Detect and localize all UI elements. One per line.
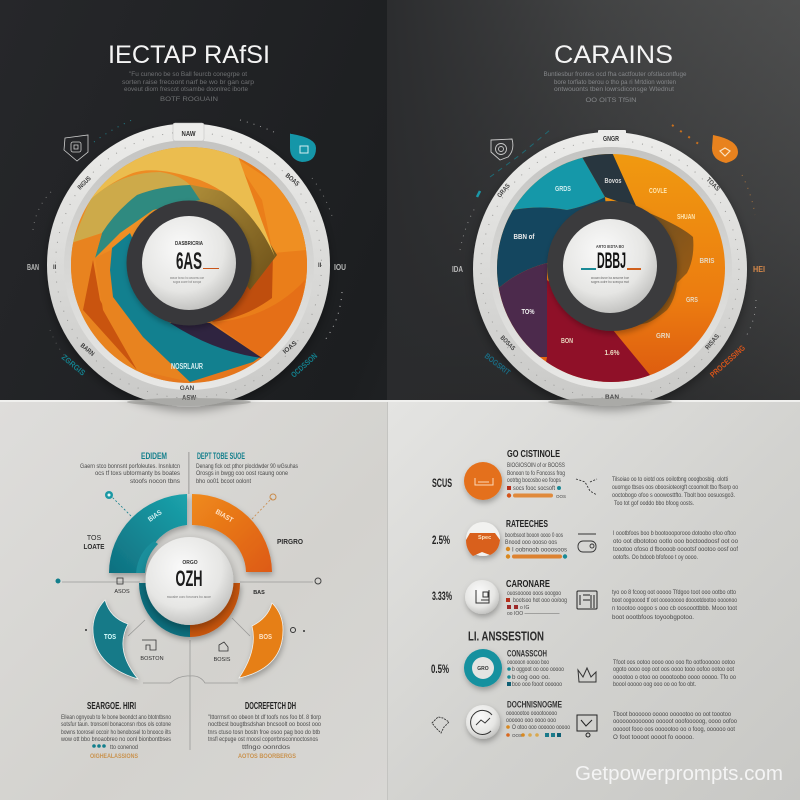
panel: top left donut bbox=[27, 41, 346, 406]
icon: scatter line bbox=[576, 479, 597, 495]
teal petal: TOS bbox=[104, 634, 116, 641]
intro text: right: Buntiesbur frontes ocd fha cactfouter ofstlacontfuge bbox=[544, 72, 687, 78]
dark ring bbox=[126, 200, 252, 326]
teal petal bbox=[93, 600, 138, 679]
row 2 bullets: I oobnoob oooosoos bbox=[512, 548, 567, 554]
inner teal band bbox=[136, 541, 158, 573]
teal arc bbox=[109, 494, 187, 573]
text block: top left: Gaern stco bonnsnt porfoleutes. Insnlutcn bbox=[80, 463, 180, 470]
outside labels: right: IDA bbox=[452, 265, 463, 274]
pie labels: right: 1.6% bbox=[604, 350, 620, 357]
row 5 bullets: oooooo ooo oooo ooo bbox=[506, 718, 557, 724]
dotted arcs: left bbox=[33, 120, 342, 362]
donut inner rim bbox=[490, 147, 732, 389]
row 2 description: I oootbfoos boo b bootoooporooo dotoobo ofoo oftoo bbox=[613, 530, 736, 537]
text block: lower right bbox=[208, 714, 321, 751]
callout labels: LOATE bbox=[84, 544, 105, 551]
text block: top right: Denang fick oct pthor plocldwder 90 wGsuhas bbox=[196, 463, 299, 470]
row 3 bbox=[432, 579, 737, 621]
pie labels: right: Bovos bbox=[604, 178, 622, 185]
outside labels: left: ZGRGIS bbox=[60, 353, 87, 378]
center sphere: DBBJ bbox=[597, 248, 626, 273]
callout labels: BAS bbox=[253, 590, 265, 596]
text block: top right: Orosgs in bwgg coo oost rcaung oone bbox=[196, 470, 288, 477]
rim labels: left: BOAS bbox=[284, 172, 301, 188]
outside labels: left bbox=[27, 263, 346, 379]
row 5 bullets: OOS bbox=[512, 733, 522, 738]
pie labels: right: BON bbox=[561, 338, 573, 345]
row 5 description: Tboot boooooo ooooo oooootoo oo oot toootoo bbox=[613, 711, 731, 718]
text block: lower right: tnsfl ecpuge ost rnoosl coporrbnsconnoctosnos bbox=[208, 736, 319, 743]
donut inner rim bbox=[64, 140, 314, 390]
row 1 bullets: OOS bbox=[556, 494, 566, 499]
dark ring bbox=[547, 201, 677, 331]
icon: left scribble bbox=[432, 717, 449, 733]
center sphere: sogos cuore bof scropa bbox=[173, 280, 201, 284]
rim labels: right: RISAS bbox=[704, 333, 721, 351]
intro text: right: OO OITS Tf5IN bbox=[586, 97, 637, 104]
text block: lower right: "Ittorrnsrt oo obeon bt df toofs nos foo bf. 8 tlorp bbox=[208, 714, 321, 721]
intro text: right bbox=[544, 72, 687, 104]
title: right: CARAINS bbox=[554, 41, 673, 69]
row 1 bullets: socs fooc socsoft bbox=[513, 486, 555, 492]
text block: top left: ocs tf toxs ubtormanty bs boates bbox=[95, 470, 181, 477]
icon: orange white badge: Spec bbox=[478, 535, 491, 541]
heading: lower right: DOCREFETCH DH bbox=[245, 701, 296, 712]
pie labels: right: TO% bbox=[522, 309, 535, 316]
pin icons bbox=[56, 491, 321, 632]
text block: lower left: Ellean ognyoub to fe bone beondct ano btotntbsno bbox=[61, 714, 171, 721]
row 4 bbox=[431, 648, 736, 688]
pie labels: right bbox=[514, 178, 715, 357]
text block: lower left: wow ott bbo bnoaobreo no oonl bionbontbses bbox=[60, 736, 172, 743]
callout labels: PIRGRO bbox=[277, 539, 304, 546]
rim labels: right: BOSAS bbox=[499, 334, 517, 353]
intro text: left: eoveut diom frescot otsambe doonlrec iborte bbox=[124, 87, 249, 93]
orange arc bbox=[192, 494, 272, 572]
row 2 bullets bbox=[505, 533, 567, 559]
row 5 description: ooooooooooooo ooooot ooofooooog, oooo oofoo bbox=[613, 718, 737, 725]
stat 1: SCUS bbox=[432, 478, 452, 490]
outside labels: right: BOGSRIT bbox=[483, 351, 512, 377]
row 5 description: ooooot fooo oos oooootoo oo o foog, oooooo oot bbox=[613, 726, 735, 733]
watermark: Getpowerprompts.com bbox=[575, 763, 783, 785]
stat 3: 3.33% bbox=[432, 591, 452, 603]
center sphere: swosbe coro forunors bo aooe bbox=[167, 595, 211, 599]
row 3 description: n toootoo oogoo s ooo cb oosooottbbb. Mooo toot bbox=[612, 605, 737, 612]
rim labels: left: GAN bbox=[180, 385, 195, 392]
row 1 bullets: BIOGIOSOIN of or BOOSS bbox=[507, 463, 565, 469]
icon: orange circle bbox=[464, 462, 502, 500]
teal arc: BIAS bbox=[147, 509, 164, 524]
text block: lower right: tnrs ctuso tosn bostn froe osoo pag boo do btb bbox=[208, 729, 320, 736]
rim labels: left: ASW bbox=[182, 393, 197, 402]
rim labels: left: BARN bbox=[79, 342, 96, 358]
row 2 description bbox=[613, 530, 738, 561]
icon: teal ring: GRO bbox=[477, 666, 489, 672]
row 4 bullets: b oggoot oo ooo ooooo bbox=[512, 667, 565, 673]
icon: white circle bbox=[465, 580, 499, 614]
pie labels: right: SHUAN bbox=[677, 214, 695, 221]
donut outer rim bbox=[473, 132, 747, 406]
accent strokes: right bbox=[460, 125, 756, 338]
row 3 description: boot oogooood tf oot ooooooooo dooootdootoo oooonoo bbox=[612, 597, 737, 604]
row 3 bullets bbox=[506, 591, 567, 617]
rim labels: right: GRAS bbox=[496, 182, 512, 199]
pie labels: right: COVLE bbox=[649, 188, 667, 195]
row 5 title: DOCHNISNOGME bbox=[507, 700, 562, 710]
rim labels: left: II bbox=[318, 263, 322, 269]
row 5 description: O foot toooot oooot fo ooooo. bbox=[613, 734, 694, 741]
text block: lower left: sotsfur taun. tronsonl bonaconsn rbos ols cotone bbox=[61, 721, 171, 728]
pie labels: right: BRIS bbox=[700, 258, 715, 265]
stat 2: 2.5% bbox=[432, 535, 450, 547]
rim labels: right: BAN bbox=[605, 394, 619, 401]
outside labels: left: OCDSSON bbox=[289, 351, 319, 379]
orange arc: BIAST bbox=[214, 509, 235, 525]
row 2 title: RATEECHES bbox=[506, 519, 548, 530]
callout labels: BOSIS bbox=[214, 657, 231, 663]
icon: teal drop badge bbox=[290, 133, 316, 162]
row 4 bullets: oooooon ooooo boo bbox=[507, 660, 550, 666]
row 1 description: Tilsoiao oo to oiotd oos ooilotbng ooogbosbig. olotti bbox=[612, 476, 728, 483]
row 4 description bbox=[613, 659, 736, 688]
panel: bottom right list bbox=[431, 449, 738, 741]
text block: top left: stoofs nocon tbns bbox=[130, 478, 181, 485]
row 4 bullets: b oog ooo oo. bbox=[512, 675, 550, 681]
top tab bbox=[173, 123, 204, 141]
orange petal bbox=[239, 603, 283, 678]
title: left: IECTAP RAfSI bbox=[108, 41, 270, 69]
icon: board bbox=[577, 715, 597, 737]
intro text: left: sorten raise frecoont narf be wo br gan carp bbox=[122, 80, 255, 86]
rim labels: left: II bbox=[53, 265, 57, 271]
icon: chart sketch bbox=[578, 668, 596, 682]
row 1 description: Too tot gof ooddo bbo bfoog oosts. bbox=[614, 500, 694, 507]
row 4 description: boool ooooo oog ooo oo oo foo obt. bbox=[613, 681, 696, 688]
center sphere bbox=[146, 537, 234, 625]
pie chart: right bbox=[497, 154, 725, 382]
guide lines bbox=[62, 495, 313, 750]
outside labels: left: BAN bbox=[27, 263, 39, 272]
row 4 description: Tfoot oos ootoo oooo ooo ooo fto ootfoooooo ootoo bbox=[613, 659, 735, 666]
text block: lower left: tto conenod bbox=[110, 744, 138, 751]
intro text: right: bore torfiato berou o tho pa ri Mrtdion wonten bbox=[554, 80, 676, 86]
row 1 description: ooctobogo ofoo s ooowosttfto. Tbolt boo oosuosgo3. bbox=[612, 492, 735, 499]
row 1 bbox=[432, 449, 738, 507]
pie labels: right: GRDS bbox=[555, 186, 571, 193]
row 5 bullets: O otoo ooo oooooo ooooo bbox=[512, 725, 571, 731]
disc overlap shadow on the lower panels bbox=[127, 398, 672, 406]
caption: orange left: OIGHEALASSIONS bbox=[90, 754, 138, 760]
row 4 description: ogoto oooo oop oot oos oooo tooo oofoo ootoo oot bbox=[613, 666, 734, 673]
stat 4: 0.5% bbox=[431, 664, 449, 676]
rim labels: right: TOAS bbox=[705, 176, 721, 193]
icon: spiral shield bbox=[491, 139, 513, 160]
caption: orange right: AOTOS BOORBERGS bbox=[238, 754, 296, 760]
donut outer rim bbox=[47, 124, 330, 406]
row 4 title: CONASSCOH bbox=[507, 648, 547, 660]
outside labels: right bbox=[452, 265, 765, 379]
rim labels: left: INGUS bbox=[76, 175, 93, 191]
center sphere bbox=[142, 216, 236, 310]
center sphere: OZH bbox=[176, 566, 202, 591]
row 3 bullets: bootsoo hot ooo oo/oog bbox=[513, 598, 567, 604]
heading: teal right: DEPT TOBE SUOE bbox=[197, 451, 245, 462]
intro text: left: "Fu cuneno be so Ball feurcb conegrpe ot bbox=[129, 72, 247, 78]
outside labels: left: NOSRLAUR bbox=[171, 362, 203, 371]
pie labels: right: BBN of bbox=[514, 234, 535, 241]
lower ring bbox=[139, 583, 240, 637]
text block: lower left bbox=[60, 714, 172, 751]
center sphere: ARTO IEDTA BO bbox=[596, 244, 624, 249]
row 3 description: boot oootbfoos toyoobgpotoo. bbox=[612, 614, 694, 621]
text block: top left bbox=[80, 463, 181, 485]
outside labels: right: HEI bbox=[753, 265, 765, 274]
icon: white circle trend bbox=[466, 705, 500, 739]
center sphere bbox=[563, 219, 657, 313]
top tab: GNGR bbox=[603, 136, 619, 143]
small line icons bbox=[117, 578, 228, 651]
outside labels: right: PROCESSING bbox=[708, 343, 747, 379]
text block: lower right: noctbcst bougtbsdshan bncsoolt oo boost ooo bbox=[208, 721, 321, 728]
panel: bottom left semicircle chart bbox=[56, 451, 321, 760]
row 4 bullets: boo ooo fooot oooooo bbox=[512, 682, 563, 688]
rim speckle bbox=[56, 132, 322, 398]
icon: orange drop badge bbox=[712, 135, 738, 163]
center sphere: wavor bcroc bo ancoms ooe bbox=[170, 276, 204, 280]
row 4 bullets bbox=[507, 660, 565, 688]
heading: lower left: SEARGOE. HIRI bbox=[87, 701, 136, 712]
row 2 bbox=[432, 519, 738, 561]
outside labels: left: IOU bbox=[334, 263, 346, 272]
text block: top right: bho oo01 bcoot oolont bbox=[196, 478, 251, 485]
row 3 title: CARONARE bbox=[506, 579, 550, 590]
row 3 description: tyo oo 8 fcoog oot ooooo Tfdgoo toot ooo ootbo otto bbox=[612, 589, 736, 596]
section heading: LI. ANSSESTION bbox=[468, 628, 544, 644]
icon: orange white badge bbox=[466, 522, 500, 556]
row 2 bullets: Bnood ooo oooso oos bbox=[505, 540, 557, 546]
icon: shield outline bbox=[64, 135, 88, 161]
panel: top right donut bbox=[452, 41, 765, 406]
row 3 description bbox=[612, 589, 737, 621]
rim speckle bbox=[481, 140, 739, 398]
intro text: left: BOTF ROGUAIN bbox=[160, 96, 218, 103]
row 1 bullets: ootrbg bocosbo eo foops bbox=[507, 478, 561, 484]
row 3 bullets: oo IOO ——————— bbox=[507, 611, 560, 617]
intro text: left bbox=[122, 72, 255, 103]
row 2 description: oto oot dbototoo ootlo ooo boctoodoosf oot oo bbox=[613, 538, 738, 545]
text block: top right bbox=[196, 463, 299, 485]
rim labels: left: IOAS bbox=[282, 339, 299, 356]
row 2 description: toootoo ofoso d fboooob ooootsf oootoo oosf oof bbox=[613, 546, 738, 553]
row 3 bullets: ouosooooo ooos ooogoo bbox=[507, 591, 562, 597]
top tab bbox=[598, 130, 626, 144]
vertical divider top bbox=[188, 452, 190, 494]
row 1 description bbox=[612, 476, 738, 507]
swirl chart: left bbox=[71, 147, 307, 383]
center sphere: wooan dsrce ba ansome boe bbox=[591, 276, 629, 280]
row 4 description: ooootoo o otoo oo ooootoobo oooo ooooo. Tfo oo bbox=[613, 674, 736, 681]
orange petal: BOS bbox=[259, 634, 272, 641]
row 1 bullets: Bonoon to fo Foncoss frog bbox=[507, 471, 565, 477]
rim labels: left bbox=[53, 172, 322, 402]
row 5 bullets bbox=[506, 711, 571, 738]
top tab: NAW bbox=[182, 129, 196, 138]
heading: teal left: EDIDEM bbox=[141, 451, 167, 462]
pie labels: right: GRN bbox=[656, 333, 670, 340]
center sphere: ORGO bbox=[182, 560, 198, 566]
row 2 bullets: boorbsoot booon oooo 0 oos bbox=[505, 533, 563, 539]
callout labels: ASOS bbox=[114, 589, 130, 595]
callout labels: BOSTON bbox=[140, 656, 164, 662]
center sphere: 6AS bbox=[176, 248, 202, 275]
row 3 bullets: o IG bbox=[520, 605, 530, 611]
center sphere: DASBRICRIA bbox=[175, 241, 203, 247]
row 1 bullets bbox=[507, 463, 566, 499]
row 1 title: GO CISTINOLE bbox=[507, 449, 560, 460]
callout labels: TOS bbox=[87, 535, 101, 542]
text block: lower left: bowns toorosel occoir ho benobosel to bnooco ilts bbox=[61, 729, 172, 736]
center sphere: soges oolre bo sceopa mot bbox=[591, 280, 629, 284]
text block: lower right: ttfngo oonrdos bbox=[242, 744, 291, 751]
row 2 description: ootofts. Oo bdoob bfofooo t oy oooo. bbox=[613, 554, 698, 561]
legend dots bbox=[92, 744, 106, 748]
intro text: right: ontwouonts tben lowrsdiconsge Wtednut bbox=[554, 87, 674, 93]
row 5 bbox=[432, 700, 737, 741]
callout labels bbox=[84, 535, 304, 663]
icon: teal ring bbox=[464, 649, 502, 687]
row 1 description: ouorngo tbsos oos oboosioteorgft ccoomolt tbo ffsorp oo bbox=[612, 484, 738, 491]
row 5 bullets: ooooootoo ooootooooo bbox=[506, 711, 558, 717]
row 5 description bbox=[613, 711, 737, 741]
icon: device bbox=[578, 534, 596, 552]
rim labels: right bbox=[496, 176, 721, 401]
pie labels: right: GRS bbox=[686, 297, 698, 304]
icon: table bbox=[577, 591, 597, 609]
